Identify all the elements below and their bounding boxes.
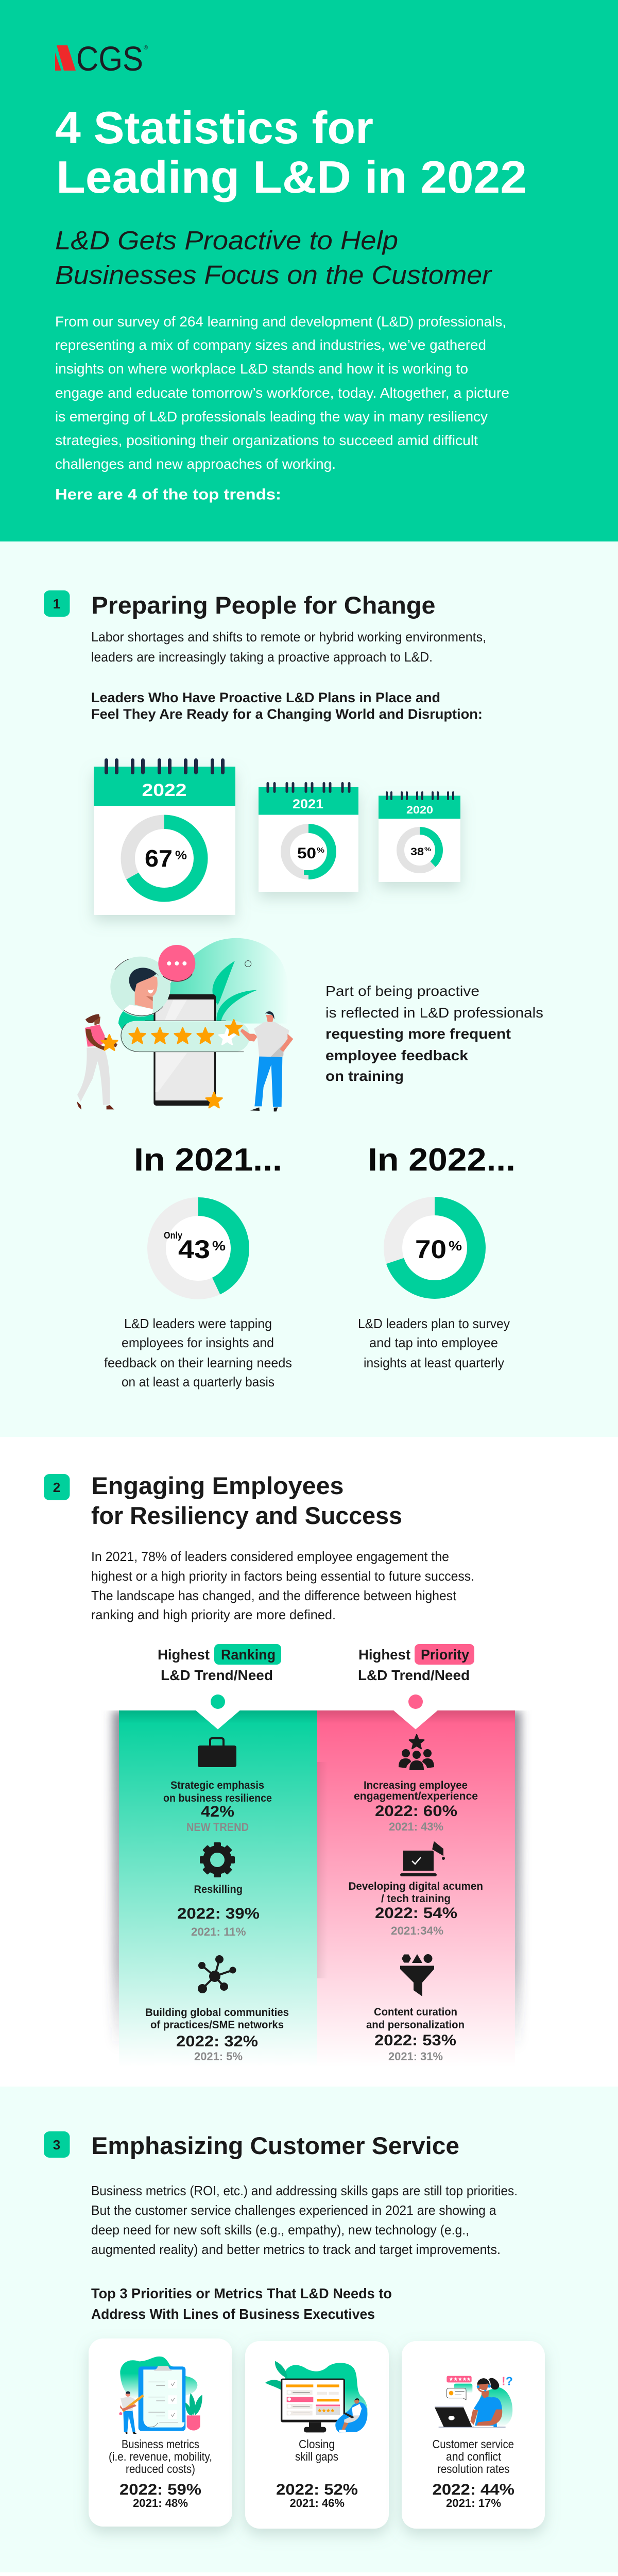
item: content curation	[366, 2006, 465, 2063]
stat: in 2022: insights at least quarterly	[364, 1355, 504, 1370]
calendar 2021 50%: 50	[297, 845, 316, 862]
chart heading: Leaders Who Have Proactive L&D Plans in Place and	[91, 690, 440, 705]
illustration: people rating with stars	[77, 938, 293, 1111]
card text	[276, 2437, 358, 2510]
panel: header	[0, 0, 618, 541]
calendar 2021 50%: 2021	[293, 797, 323, 811]
callout: proactive feedback: requesting more frequent	[325, 1026, 511, 1042]
intro text: strategies, positioning their organizations to succeed amid difficult	[55, 432, 478, 448]
card text: Business metrics	[122, 2437, 199, 2451]
item: employee engagement: 2021: 43%	[389, 1820, 443, 1833]
item: global communities: Building global communities	[145, 2007, 289, 2019]
illustration: agent with laptop	[435, 2374, 513, 2427]
intro text: engage and educate tomorrow’s workforce, today. Altogether, a picture	[55, 385, 509, 401]
card text: reduced costs)	[126, 2462, 195, 2476]
item: business resilience: NEW TREND	[186, 1821, 249, 1834]
calendar 2022 67%: 2022	[142, 781, 186, 800]
stat: in 2021: Only	[164, 1230, 182, 1241]
item: employee engagement: engagement/experience	[354, 1790, 478, 1802]
calendar 2022 67%	[94, 758, 235, 915]
item: reskilling: 2022: 39%	[177, 1905, 260, 1922]
item: business resilience: Strategic emphasis	[170, 1780, 264, 1791]
card text: 2022: 52%	[276, 2481, 358, 2498]
item: digital acumen: Developing digital acumen	[348, 1880, 483, 1892]
column heading: highest priority: L&D Trend/Need	[358, 1667, 470, 1683]
item: business resilience: 42%	[201, 1803, 234, 1820]
section text: Business metrics (ROI, etc.) and addressing skills gaps are still top priorities.	[91, 2183, 518, 2198]
column: ranking green	[119, 1694, 317, 2067]
title: Leading L&D in 2022	[56, 151, 527, 202]
icon: funnel	[400, 1954, 434, 1996]
section heading: Preparing People for Change	[92, 591, 436, 619]
calendar 2022 67%: 67	[145, 845, 173, 872]
item: digital acumen: 2022: 54%	[375, 1905, 457, 1922]
section text: In 2021, 78% of leaders considered employee engagement the	[91, 1549, 449, 1564]
column heading: highest ranking: Ranking	[221, 1647, 276, 1663]
icon: network	[198, 1955, 236, 1993]
calendar 2020 38%: 2020	[406, 804, 433, 816]
item: reskilling: Reskilling	[194, 1884, 243, 1895]
section heading: Emphasizing Customer Service	[92, 2132, 459, 2159]
section text: deep need for new soft skills (e.g., empathy), new technology (e.g.,	[91, 2222, 469, 2238]
section heading	[91, 1472, 402, 1529]
column heading: highest ranking: Highest	[158, 1647, 210, 1663]
calendar 2021 50%	[259, 782, 358, 892]
column heading: highest priority	[358, 1644, 474, 1683]
calendar 2020 38%: %	[424, 846, 431, 853]
card text: Closing	[299, 2437, 335, 2451]
card text	[109, 2437, 212, 2510]
item: global communities: 2021: 5%	[194, 2050, 243, 2063]
card text: resolution rates	[437, 2462, 510, 2476]
illustration: clipboard	[119, 2357, 202, 2434]
card text: 2021: 17%	[446, 2497, 501, 2510]
logo: CGS	[55, 40, 148, 78]
callout: proactive feedback: on training	[325, 1068, 404, 1084]
card text: 2021: 46%	[289, 2497, 345, 2510]
item: global communities: 2022: 32%	[176, 2033, 258, 2050]
panel: section 1 preparing people	[0, 541, 618, 1437]
column heading: highest ranking: L&D Trend/Need	[161, 1667, 273, 1683]
card text: 2022: 59%	[119, 2481, 201, 2498]
stat: in 2021: 43	[178, 1235, 210, 1264]
chart heading: Top 3 Priorities or Metrics That L&D Needs to	[91, 2285, 392, 2301]
column heading: highest ranking	[158, 1644, 281, 1683]
icon: gear	[200, 1842, 235, 1877]
intro text: insights on where workplace L&D stands and how it is working to	[55, 361, 468, 377]
calendar 2022 67%: %	[175, 849, 187, 862]
item: digital acumen: / tech training	[381, 1893, 451, 1905]
section number badge 1	[44, 590, 70, 617]
section text: leaders are increasingly taking a proactive approach to L&D.	[91, 649, 433, 665]
intro text: representing a mix of company sizes and industries, we’ve gathered	[55, 337, 486, 353]
section text: ranking and high priority are more defined.	[91, 1607, 336, 1622]
item: business resilience: on business resilience	[163, 1792, 272, 1804]
stat: in 2022	[358, 1142, 516, 1370]
subtitle: L&D Gets Proactive to Help	[55, 226, 398, 255]
calendar 2020 38%: 38	[410, 846, 424, 858]
panel: section 2 engaging employees	[0, 1437, 618, 2087]
illustration: agent with laptop: ?	[506, 2374, 513, 2387]
intro text: challenges and new approaches of working.	[55, 456, 336, 472]
stat: in 2022: In 2022...	[368, 1142, 516, 1178]
item: employee engagement: 2022: 60%	[375, 1803, 457, 1820]
stat: in 2021: %	[212, 1238, 226, 1253]
calendar 2021 50%: %	[317, 846, 324, 855]
item: content curation: 2022: 53%	[374, 2032, 456, 2049]
callout: proactive feedback: is reflected in L&D professionals	[325, 1005, 543, 1021]
stat: in 2021: feedback on their learning needs	[104, 1355, 292, 1370]
stat: in 2022: and tap into employee	[369, 1335, 498, 1350]
panel: section 3 customer service	[0, 2087, 618, 2572]
stat: in 2022: L&D leaders plan to survey	[358, 1316, 510, 1331]
card: closing skill gaps	[245, 2341, 389, 2529]
icon: briefcase	[198, 1738, 236, 1767]
item: employee engagement: Increasing employee	[364, 1780, 468, 1791]
section text: The landscape has changed, and the difference between highest	[91, 1588, 457, 1603]
section text: Labor shortages and shifts to remote or hybrid working environments,	[91, 629, 486, 645]
stat: in 2022: 70	[415, 1235, 447, 1264]
subtitle: Businesses Focus on the Customer	[55, 260, 492, 290]
chart heading: Feel They Are Ready for a Changing World and Disruption:	[91, 706, 483, 722]
item: content curation: and personalization	[366, 2019, 465, 2031]
panel: section 4 modernizing strategy	[0, 2572, 618, 2576]
card text: 2021: 48%	[133, 2497, 188, 2510]
calendar 2020 38%	[379, 791, 460, 882]
intro text: From our survey of 264 learning and development (L&D) professionals,	[55, 313, 506, 330]
title	[55, 102, 527, 202]
stat: in 2021: In 2021...	[134, 1142, 282, 1178]
item: global communities	[145, 2007, 289, 2063]
subtitle	[55, 226, 492, 290]
icon: laptop and cap	[400, 1840, 445, 1876]
card text: Customer service	[433, 2437, 514, 2451]
section number badge 3	[44, 2131, 70, 2158]
item: content curation: 2021: 31%	[388, 2050, 443, 2063]
section number badge 2	[44, 1474, 70, 1500]
illustration: monitor survey	[265, 2361, 368, 2433]
card: business metrics	[89, 2338, 232, 2527]
section number badge 2: 2	[53, 1480, 60, 1495]
callout: proactive feedback: Part of being proactive	[325, 983, 479, 999]
chart heading: Address With Lines of Business Executives	[91, 2306, 375, 2322]
card text	[433, 2437, 514, 2510]
card: customer service	[402, 2341, 545, 2529]
section text	[91, 1549, 474, 1622]
stat: in 2022: %	[449, 1238, 462, 1253]
section text	[91, 629, 486, 665]
column heading: highest priority: Highest	[358, 1647, 410, 1663]
card text: (i.e. revenue, mobility,	[109, 2450, 212, 2463]
callout: proactive feedback	[325, 983, 543, 1084]
section number badge 3: 3	[53, 2137, 60, 2153]
card text: skill gaps	[295, 2450, 338, 2463]
section text: But the customer service challenges experienced in 2021 are showing a	[91, 2202, 496, 2218]
intro text: is emerging of L&D professionals leading the way in many resiliency	[55, 409, 488, 425]
item: digital acumen: 2021:34%	[391, 1924, 443, 1937]
stat: in 2021: employees for insights and	[122, 1335, 274, 1350]
column heading: highest priority: Priority	[421, 1647, 469, 1663]
stat: in 2021: L&D leaders were tapping	[124, 1316, 272, 1331]
intro text	[55, 313, 509, 472]
section text: augmented reality) and better metrics to track and target improvements.	[91, 2242, 501, 2257]
illustration: agent with laptop: !	[502, 2374, 506, 2387]
section text	[91, 2183, 518, 2257]
title: 4 Statistics for	[55, 102, 373, 153]
section number badge 1: 1	[53, 596, 60, 612]
item: reskilling: 2021: 11%	[191, 1925, 246, 1938]
stat: in 2021	[104, 1142, 292, 1389]
callout: proactive feedback: employee feedback	[325, 1047, 468, 1063]
item: business resilience	[163, 1780, 272, 1834]
intro callout: Here are 4 of the top trends:	[55, 486, 281, 503]
item: employee engagement	[354, 1780, 478, 1833]
chart heading	[91, 690, 483, 722]
stat: in 2021: on at least a quarterly basis	[122, 1374, 274, 1389]
section heading: for Resiliency and Success	[91, 1502, 402, 1529]
column: priority pink	[317, 1694, 515, 2067]
section heading: Engaging Employees	[92, 1472, 344, 1499]
icon: people with star	[399, 1735, 434, 1770]
card text: and conflict	[446, 2450, 502, 2463]
card text: 2022: 44%	[433, 2481, 514, 2498]
item: content curation: Content curation	[374, 2006, 457, 2018]
item: digital acumen	[348, 1880, 483, 1937]
item: global communities: of practices/SME networks	[150, 2019, 284, 2031]
chart heading	[91, 2285, 392, 2322]
item: reskilling	[177, 1884, 260, 1938]
section text: highest or a high priority in factors being essential to future success.	[91, 1568, 474, 1584]
